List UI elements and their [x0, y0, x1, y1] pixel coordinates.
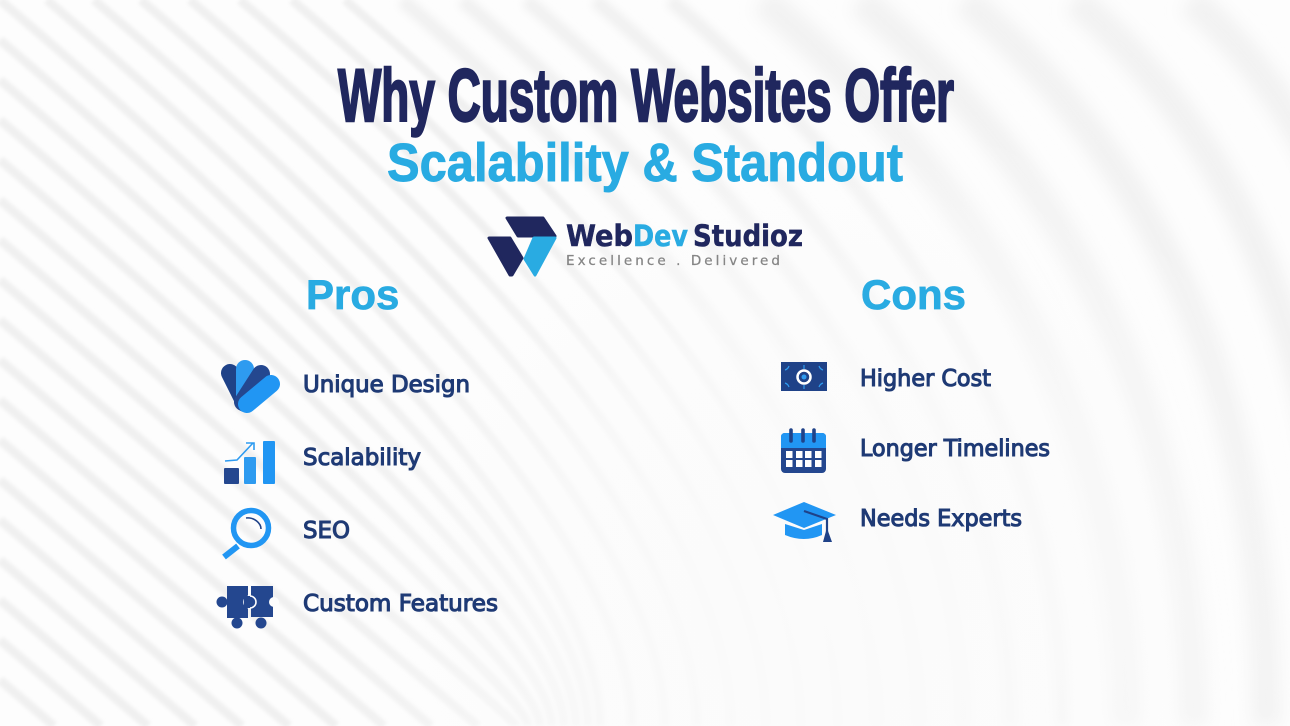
label: longer timelines: Longer Timelines: [860, 436, 1050, 462]
icon: puzzle pieces: [216, 586, 279, 628]
icon: graduation cap: [773, 502, 836, 542]
label: seo: SEO: [303, 518, 350, 544]
logo wordmark: Web: [566, 219, 633, 253]
icon: banknote: [781, 362, 827, 391]
logo: WebDev Studioz: [489, 218, 803, 275]
icon: calendar: [781, 430, 826, 473]
heading: cons: Cons: [861, 271, 966, 318]
logo wordmark: Studioz: [693, 219, 803, 253]
subtitle: Scalability & Standout: [387, 133, 903, 193]
icon: growth chart: [224, 441, 275, 484]
label: higher cost: Higher Cost: [860, 366, 991, 392]
heading: pros: Pros: [306, 271, 399, 318]
icon: magnifying glass: [224, 510, 268, 557]
label: needs experts: Needs Experts: [860, 506, 1022, 532]
label: custom features: Custom Features: [303, 591, 498, 617]
label: scalability: Scalability: [303, 445, 421, 471]
icon: logo mark: [489, 218, 555, 275]
logo wordmark: [566, 219, 803, 253]
logo tagline: Excellence . Delivered: [566, 253, 780, 269]
panel: pros: [216, 271, 498, 628]
label: unique design: Unique Design: [303, 372, 470, 398]
icon: colour fan: [230, 369, 271, 404]
panel: cons: [773, 271, 1050, 542]
logo wordmark: Dev: [633, 219, 688, 253]
